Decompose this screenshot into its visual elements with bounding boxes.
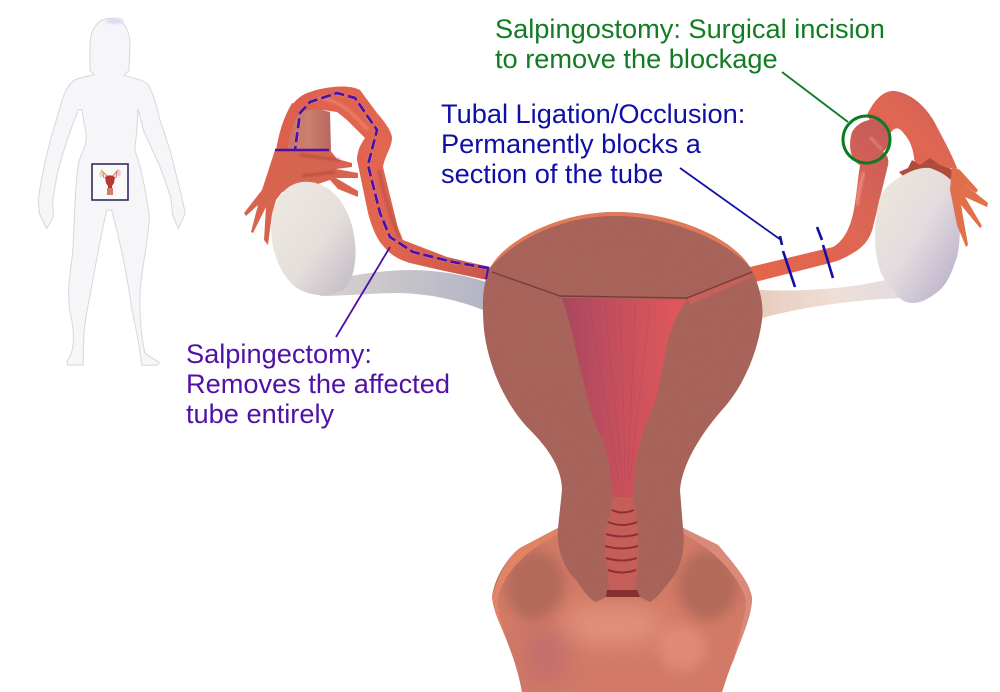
left fimbriae — [244, 150, 358, 245]
myometrium grain — [486, 341, 680, 602]
salpingectomy marker — [275, 93, 488, 337]
left tube shadow — [379, 170, 400, 238]
right fimbriae — [950, 166, 988, 247]
right fallopian tube — [750, 91, 958, 282]
fundus rim — [490, 212, 750, 268]
body figure locator — [38, 18, 185, 365]
cervical canal — [605, 497, 640, 597]
right ligament — [760, 274, 915, 318]
salpingostomy marker — [782, 72, 890, 163]
body silhouette — [38, 18, 185, 365]
label: salpingectomy: Salpingectomy: — [186, 338, 372, 369]
label: tubal ligation: section of the tube — [441, 158, 663, 189]
right ovary — [875, 168, 960, 303]
label: tubal ligation: Permanently blocks a — [441, 128, 702, 159]
fundus section line — [492, 272, 752, 298]
vaginal wall left rim — [492, 528, 558, 640]
right fornix shade — [678, 550, 738, 620]
label: salpingectomy: Removes the affected — [186, 368, 450, 399]
left ovary — [271, 182, 356, 295]
left ligament — [320, 270, 492, 312]
label: salpingostomy: Salpingostomy: Surgical incision — [495, 13, 885, 44]
tubal ligation marker — [680, 168, 833, 287]
lower left shade — [525, 627, 566, 682]
dashed tube path — [295, 93, 488, 268]
uterus cross-section — [480, 210, 765, 692]
label: salpingostomy: to remove the blockage — [495, 43, 778, 74]
uterus outer wall — [483, 212, 762, 692]
locator box — [92, 164, 128, 200]
left tube body — [276, 86, 490, 280]
blue leader line — [680, 168, 781, 240]
uterine cavity — [562, 298, 687, 497]
right tube fold — [870, 137, 882, 150]
left tube highlight — [318, 98, 368, 130]
head highlight — [106, 18, 124, 24]
end tee — [486, 267, 488, 279]
right tube body — [750, 120, 890, 282]
central glow — [557, 605, 667, 645]
vaginal highlight — [658, 624, 706, 672]
cervical folds — [605, 510, 638, 572]
right fringe dark — [899, 158, 958, 180]
cornual strip — [687, 274, 752, 305]
left fringe fingers — [244, 150, 358, 245]
right tube arch — [867, 91, 957, 172]
green leader line — [782, 72, 848, 122]
left infundibulum lower — [280, 152, 328, 195]
cut line across infundibulum — [275, 149, 329, 151]
vaginal wall right rim — [683, 528, 752, 665]
cavity folds — [590, 302, 650, 480]
vaginal shading — [505, 550, 738, 687]
dashed tube path halo — [295, 93, 488, 268]
label: tubal ligation: Tubal Ligation/Occlusion: — [441, 98, 745, 129]
ligation cut 1 — [780, 236, 795, 287]
green circle — [843, 116, 890, 163]
left fringe shadow — [300, 155, 340, 176]
purple leader line — [336, 247, 390, 337]
miniature organ — [92, 164, 128, 200]
left fornix shade — [505, 550, 565, 620]
left infundibulum interior — [276, 103, 331, 151]
label: salpingectomy: tube entirely — [186, 398, 335, 429]
ligation cut 2 — [817, 227, 833, 278]
right tube highlight — [857, 172, 864, 205]
vagina body — [492, 528, 752, 692]
left fallopian tube — [276, 86, 490, 280]
cervix tissue — [558, 528, 684, 602]
